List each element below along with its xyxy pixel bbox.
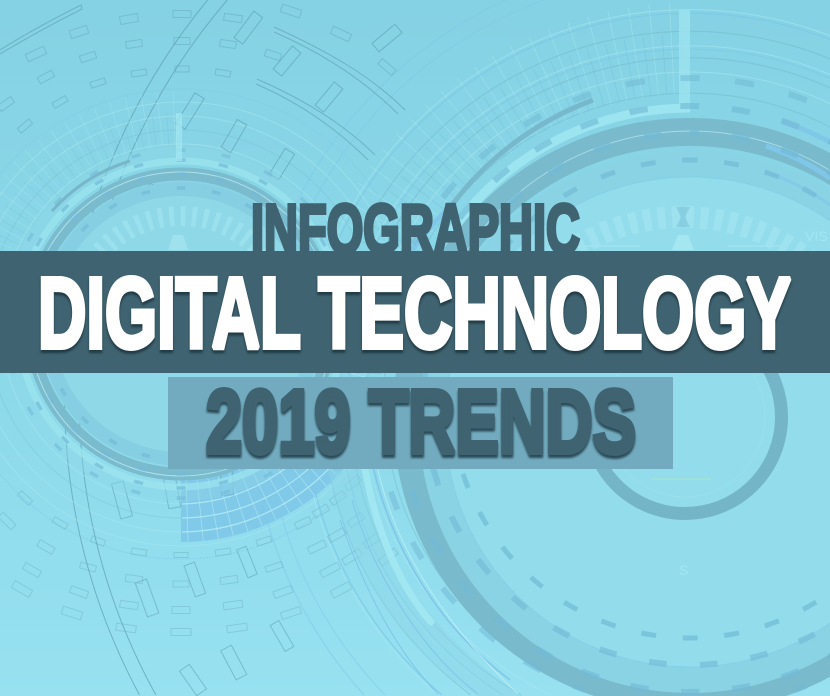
- large dial: tick marks: [552, 206, 814, 251]
- small dial: outer tech rectangles: [0, 5, 405, 237]
- large rectangles, lower area: [112, 471, 294, 696]
- large dial: dash rings: [375, 78, 830, 692]
- small dial: dark accent arc and light strip: [52, 113, 182, 211]
- faint dial letters: S: [679, 562, 688, 578]
- small dial: rings and grid: [0, 89, 416, 559]
- large dial: bright and dark accent arcs: [328, 100, 830, 696]
- small dial: tick marks: [94, 206, 266, 251]
- large dial: vertical light strip: [679, 10, 690, 104]
- large dial: core rings: [393, 118, 830, 696]
- faint dial letters: VIS: [805, 228, 828, 244]
- large dial: outer grid: [250, 0, 830, 695]
- title band: [0, 251, 830, 373]
- thin outer arcs: [65, 0, 227, 695]
- small rectangles, lower area: [0, 475, 398, 636]
- small rectangles, upper area: [0, 4, 396, 133]
- heading: INFOGRAPHIC: INFOGRAPHIC: [251, 190, 580, 268]
- subtitle: 2019 TRENDS: 2019 TRENDS: [206, 372, 636, 472]
- inner ring: [552, 284, 818, 550]
- blue grid wedge: [181, 373, 366, 542]
- faint dial letters: [679, 228, 828, 578]
- small dial: core rings: [7, 150, 355, 498]
- subtitle backing panel: [168, 377, 673, 469]
